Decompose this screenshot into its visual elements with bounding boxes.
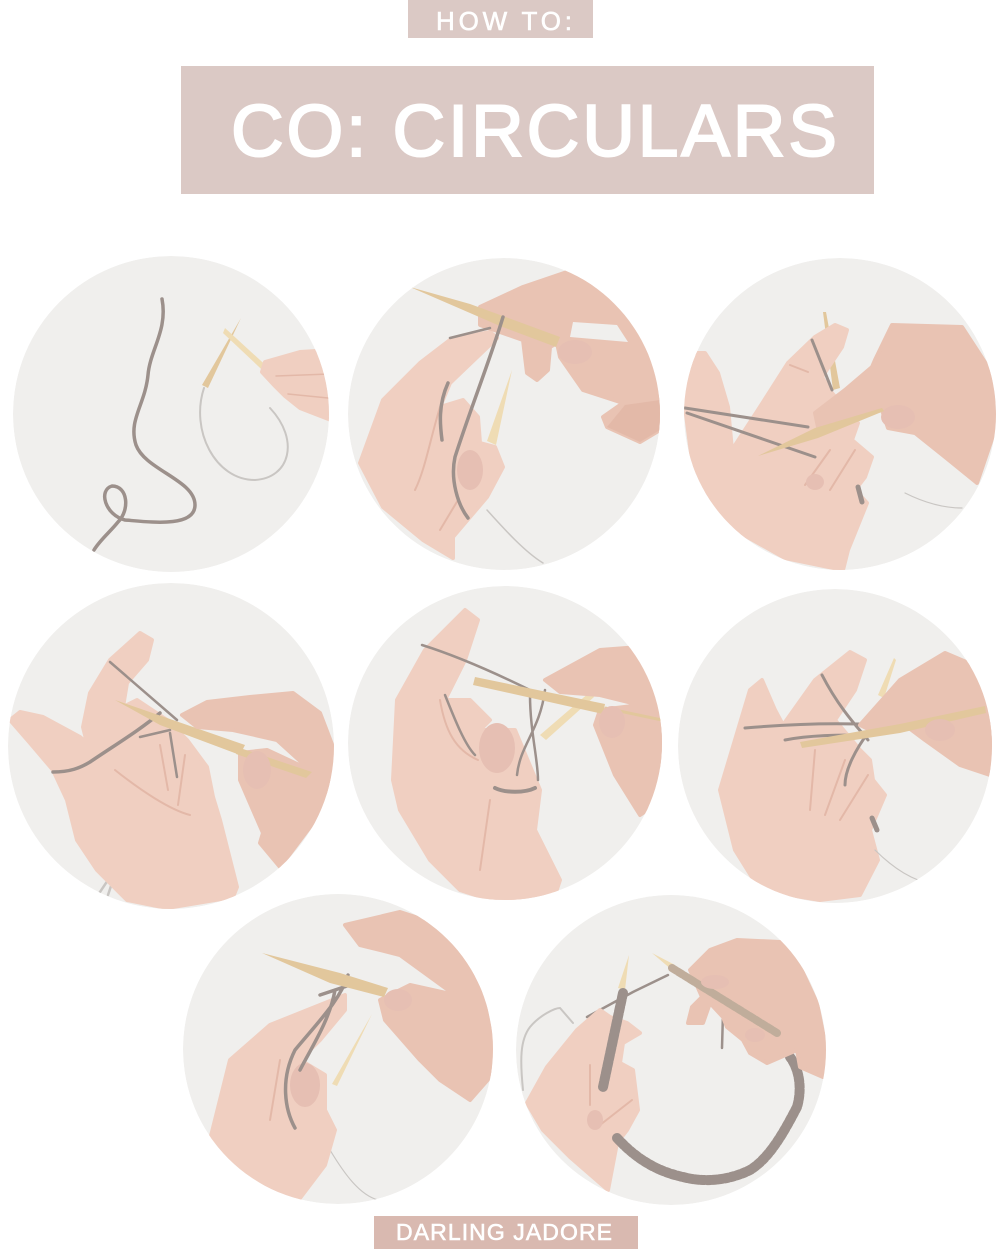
badge: Darling Jadore: DARLING JADORE: [396, 1219, 612, 1245]
badge: Darling Jadore: [374, 1216, 638, 1249]
left hand: [527, 1010, 640, 1190]
left hand: [720, 652, 885, 900]
title: CO: Circulars: [181, 66, 874, 194]
title: CO: Circulars: CO: CIRCULARS: [231, 91, 837, 172]
right hand: [182, 693, 333, 867]
step 4 photo: hand with yarn around thumb and needle: [8, 583, 334, 909]
badge: how to: HOW TO:: [436, 6, 572, 36]
step 7 photo: hands pulling loop onto needle: [183, 894, 493, 1204]
left hand: [10, 633, 237, 908]
right hand: [860, 653, 993, 775]
right hand: [688, 940, 825, 1077]
badge: how to: [408, 0, 593, 38]
right hand: [545, 647, 662, 815]
left hand: [360, 332, 503, 558]
step 6 photo: yarn through fingers with needle: [678, 589, 993, 903]
step 3 photo: yarn across palm with needle: [684, 258, 996, 570]
left hand: [210, 995, 345, 1198]
right hand: [480, 272, 660, 442]
step 8 photo: finished cast-on stitches on circular needle: [516, 895, 826, 1205]
left hand: [393, 610, 560, 903]
right hand: [815, 325, 995, 483]
right hand: [345, 912, 492, 1100]
step 1 photo: yarn and circular needle: [13, 256, 331, 572]
step 2 photo: hands holding needle with yarn looped over thumb: [348, 258, 660, 570]
left hand: [685, 325, 872, 570]
step 5 photo: thumb loop and raised hand with needle: [348, 586, 662, 903]
